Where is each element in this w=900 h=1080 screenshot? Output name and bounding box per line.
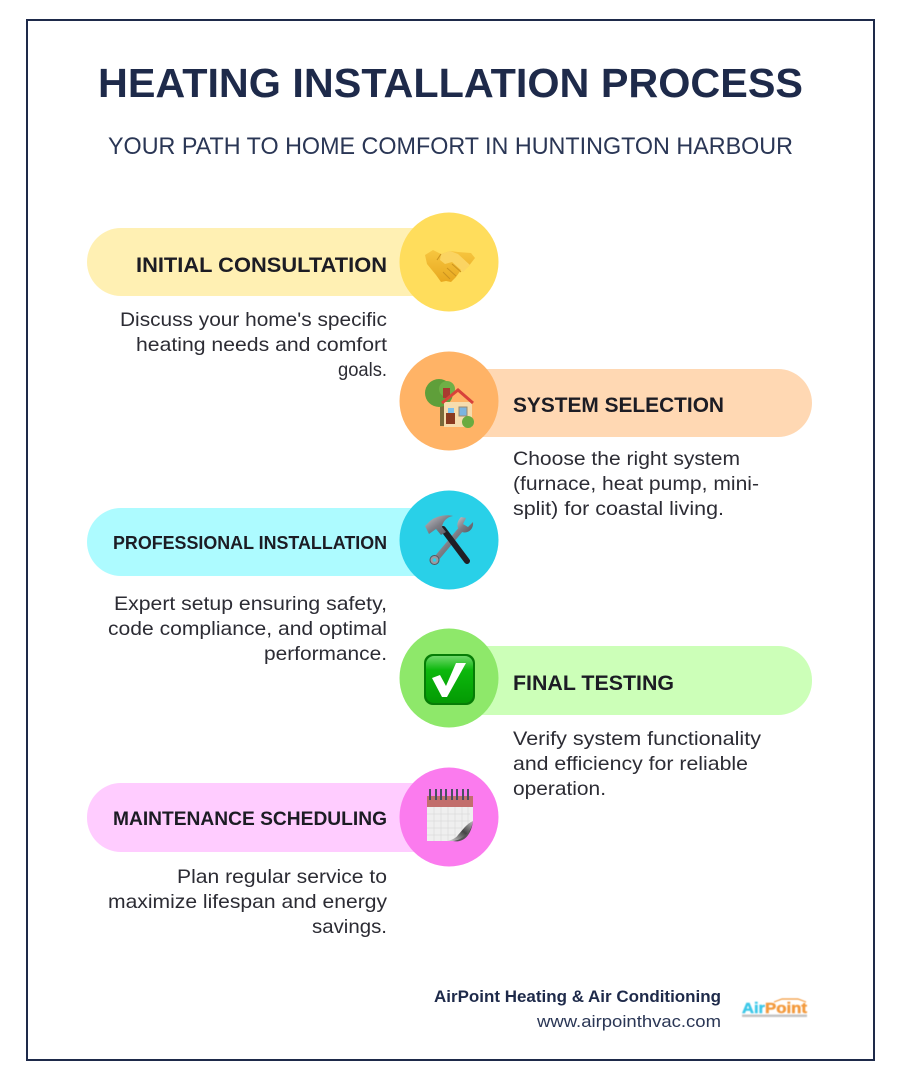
step 1 circle bbox=[400, 212, 498, 312]
step 4 description bbox=[513, 728, 761, 800]
step 3 description: performance. bbox=[264, 643, 387, 665]
step 3 description: Expert setup ensuring safety, bbox=[114, 593, 387, 615]
icon: house with tree bbox=[425, 379, 474, 428]
step 5 description: savings. bbox=[312, 916, 387, 938]
step 2 description bbox=[513, 448, 759, 520]
step 4: final testing bbox=[400, 628, 812, 800]
icon: check mark box bbox=[424, 654, 475, 705]
subtitle: YOUR PATH TO HOME COMFORT IN HUNTINGTON HARBOUR bbox=[108, 133, 793, 160]
step 2 description: (furnace, heat pump, mini- bbox=[513, 473, 759, 495]
step 3 circle bbox=[400, 490, 498, 590]
footer website: www.airpointhvac.com bbox=[536, 1012, 721, 1031]
step 4 pill bbox=[442, 646, 812, 715]
step 1 description: Discuss your home's specific bbox=[120, 309, 387, 331]
step 2: system selection bbox=[400, 352, 812, 520]
step 3 heading: PROFESSIONAL INSTALLATION bbox=[113, 532, 387, 553]
step 5 description: Plan regular service to bbox=[177, 866, 387, 888]
step 3 pill bbox=[87, 508, 457, 576]
step 4 description: Verify system functionality bbox=[513, 728, 761, 750]
step 1 description: goals. bbox=[338, 359, 387, 381]
step 2 heading: SYSTEM SELECTION bbox=[513, 393, 724, 417]
icon: hammer and wrench bbox=[425, 515, 473, 564]
footer company name: AirPoint Heating & Air Conditioning bbox=[434, 987, 721, 1006]
step 3 description bbox=[108, 593, 387, 665]
footer logo bbox=[742, 999, 807, 1017]
step 1: initial consultation bbox=[87, 212, 498, 381]
step 2 pill bbox=[442, 369, 812, 437]
title: HEATING INSTALLATION PROCESS bbox=[98, 60, 803, 106]
step 2 description: split) for coastal living. bbox=[513, 498, 724, 520]
step 5 circle bbox=[400, 768, 498, 866]
icon: handshake bbox=[425, 250, 475, 282]
step 1 pill bbox=[87, 228, 457, 296]
icon: calendar bbox=[427, 789, 473, 841]
footer logo: Point bbox=[765, 1000, 807, 1017]
step 1 description: heating needs and comfort bbox=[136, 334, 388, 356]
step 5 description: maximize lifespan and energy bbox=[108, 891, 387, 913]
step 2 circle bbox=[400, 352, 498, 450]
step 5 pill bbox=[87, 783, 457, 852]
step 3 description: code compliance, and optimal bbox=[108, 618, 387, 640]
step 5 heading: MAINTENANCE SCHEDULING bbox=[113, 808, 387, 830]
step 1 description bbox=[120, 309, 388, 381]
step 4 description: and efficiency for reliable bbox=[513, 753, 748, 775]
step 4 description: operation. bbox=[513, 778, 606, 800]
step 4 circle bbox=[400, 628, 498, 728]
footer logo: Air bbox=[742, 1000, 765, 1017]
step 3: professional installation bbox=[87, 490, 498, 665]
step 4 heading: FINAL TESTING bbox=[513, 671, 674, 695]
step 5: maintenance scheduling bbox=[87, 768, 498, 938]
step 2 description: Choose the right system bbox=[513, 448, 740, 470]
step 5 description bbox=[108, 866, 387, 938]
step 1 heading: INITIAL CONSULTATION bbox=[136, 253, 387, 277]
